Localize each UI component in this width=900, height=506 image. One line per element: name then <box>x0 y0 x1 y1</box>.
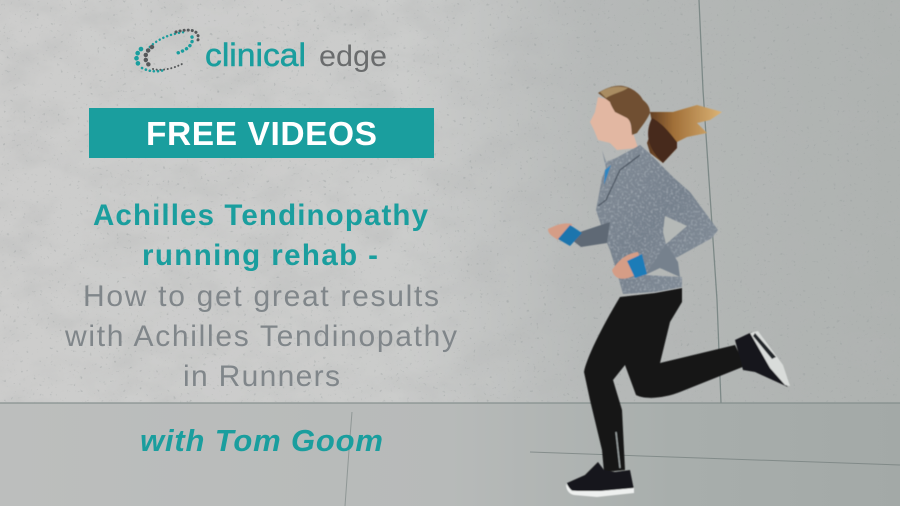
jacket <box>574 144 718 294</box>
photo: female runner <box>548 86 790 497</box>
heading: Achilles Tendinopathy running rehab <box>93 199 429 272</box>
heading: Achilles Tendinopathy running rehab: running rehab - <box>142 239 378 272</box>
logo: clinical edge: edge <box>319 40 387 73</box>
logo: clinical edge <box>136 30 387 73</box>
heading: Achilles Tendinopathy running rehab: Achilles Tendinopathy <box>93 199 429 232</box>
raised shoe <box>735 331 790 387</box>
neck and face <box>590 97 638 150</box>
background: concrete wall <box>0 0 900 404</box>
logo wordmark: clinical <box>205 37 306 73</box>
left hand and cuff <box>612 252 644 279</box>
background: pavement <box>0 402 900 506</box>
banner: free videos <box>89 108 434 158</box>
logo icon: dotted ellipse swoosh <box>136 30 198 71</box>
ponytail <box>647 105 722 163</box>
subtitle text <box>64 280 457 393</box>
subtitle text: How to get great results <box>83 280 439 313</box>
planted shoe <box>566 462 634 497</box>
hair <box>598 86 650 135</box>
right hand and cuff <box>548 223 572 240</box>
gap between arm and torso <box>663 216 687 244</box>
presenter: with Tom Goom: with Tom Goom <box>140 423 383 458</box>
banner: free videos: FREE VIDEOS <box>146 116 377 153</box>
subtitle text: in Runners <box>183 360 340 393</box>
leggings <box>584 288 745 472</box>
subtitle text: with Achilles Tendinopathy <box>64 320 457 353</box>
